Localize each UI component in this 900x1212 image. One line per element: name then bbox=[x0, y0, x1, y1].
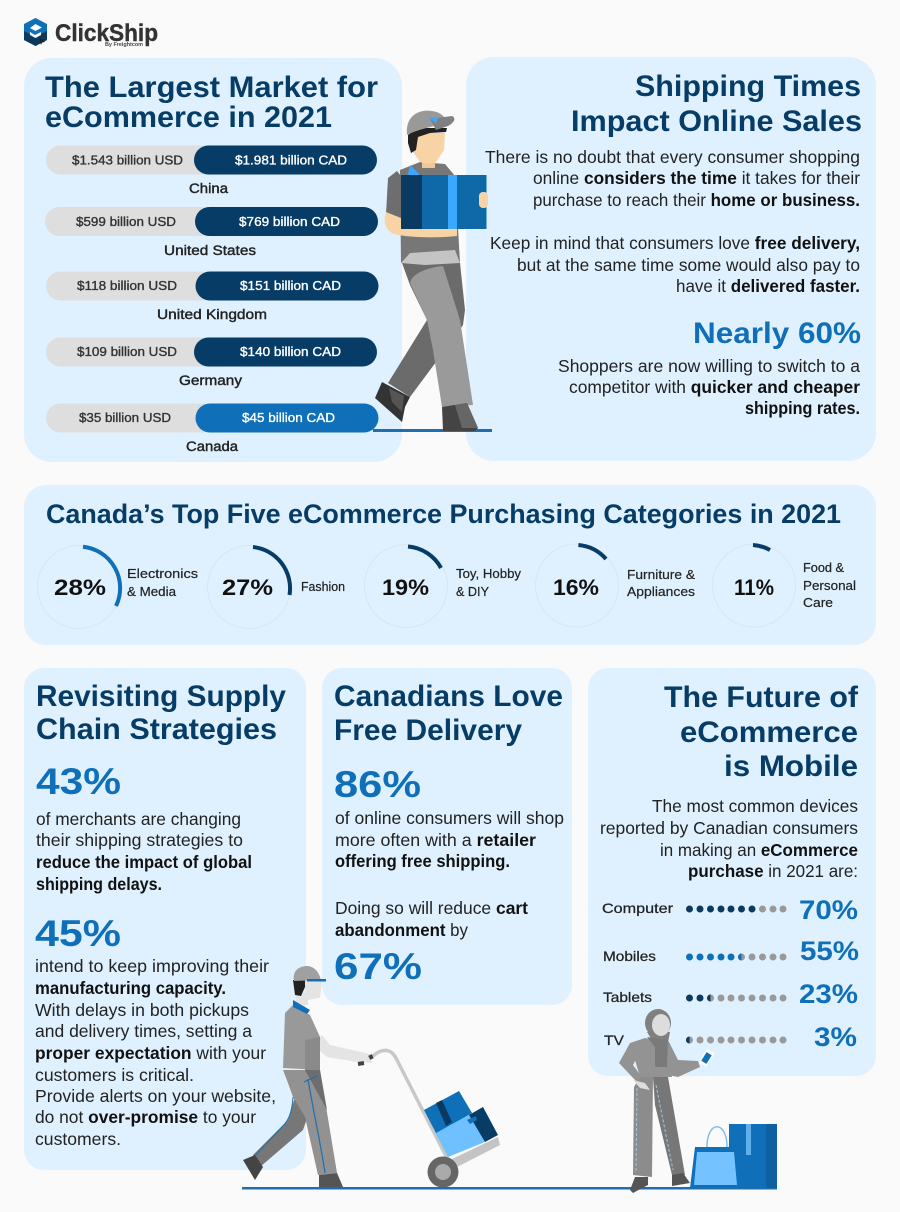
text block: merchants: of merchants are changing bbox=[36, 809, 241, 829]
text block: shop more often: of online consumers will shop bbox=[335, 808, 564, 828]
heading: mobile future: is Mobile bbox=[724, 750, 858, 783]
panel: top five categories bbox=[24, 485, 876, 645]
heading: mobile future: eCommerce bbox=[680, 716, 858, 749]
device row: mobiles: 55% bbox=[800, 936, 859, 966]
text block: manufacturing: intend to keep improving their bbox=[35, 956, 269, 976]
text block: shoppers switch bbox=[558, 356, 860, 418]
stat: 67%: 67% bbox=[334, 946, 422, 987]
ground line bbox=[373, 429, 492, 432]
donut: food 11%: Care bbox=[803, 596, 833, 610]
heading: mobile future bbox=[664, 681, 859, 783]
text block: shop more often: offering free shipping. bbox=[335, 851, 510, 871]
heading: categories: Canada’s Top Five eCommerce Purchasing Categories in 2021 bbox=[46, 499, 841, 529]
donut: toy hobby 19%: Toy, Hobby bbox=[456, 567, 522, 581]
heading: free delivery: Free Delivery bbox=[334, 714, 522, 747]
donut: food 11% bbox=[712, 544, 856, 627]
bar: Germany: Germany bbox=[179, 373, 242, 388]
donut: furniture 16%: 16% bbox=[553, 575, 599, 600]
stat: 43%: 43% bbox=[36, 761, 121, 802]
text block: devices bbox=[600, 796, 858, 881]
text block: shoppers switch: shipping rates. bbox=[745, 398, 860, 418]
donut: toy hobby 19%: 19% bbox=[382, 575, 429, 600]
donut: food 11%: Personal bbox=[803, 579, 856, 593]
device row: tv: 3% bbox=[814, 1022, 857, 1052]
text block: shoppers switch: Shoppers are now willing to switch to a bbox=[558, 356, 860, 376]
text block: cart abandonment: abandonment by bbox=[335, 920, 468, 940]
bar: China: $1.981 billion CAD bbox=[235, 152, 347, 168]
text block: merchants: their shipping strategies to bbox=[36, 830, 243, 850]
text block: manufacturing: proper expectation with your bbox=[35, 1043, 266, 1063]
donut: food 11%: 11% bbox=[734, 575, 774, 600]
stat: 45%: 45% bbox=[35, 913, 121, 954]
text block: consumer time bbox=[485, 147, 860, 210]
text block: merchants: reduce the impact of global bbox=[36, 852, 252, 872]
text block: manufacturing: customers is critical. bbox=[35, 1065, 194, 1085]
donut: furniture 16%: Furniture & bbox=[627, 568, 696, 582]
device row: computer: Computer bbox=[602, 900, 673, 916]
text block: merchants bbox=[36, 809, 252, 894]
text block: consumer time: purchase to reach their home or business. bbox=[533, 190, 860, 210]
heading: free delivery bbox=[334, 680, 563, 747]
donut: toy hobby 19% bbox=[364, 544, 522, 628]
stat: nearly 60%: Nearly 60% bbox=[693, 317, 861, 350]
device row: mobiles bbox=[603, 936, 859, 966]
panel: largest market bbox=[24, 58, 402, 462]
device row: tablets: Tablets bbox=[603, 989, 652, 1005]
bar: United States bbox=[45, 207, 378, 258]
illustration: woman with phone and bags bbox=[619, 1009, 777, 1193]
bar: United Kingdom: United Kingdom bbox=[157, 307, 267, 322]
text block: merchants: shipping delays. bbox=[36, 874, 162, 894]
wordmark: ClickShip bbox=[55, 20, 158, 47]
device row: tv bbox=[604, 1022, 857, 1052]
hand truck bbox=[373, 1050, 500, 1188]
text block: free delivery bbox=[490, 233, 860, 296]
heading: largest market: The Largest Market for bbox=[45, 71, 378, 104]
bar: United States: United States bbox=[164, 243, 256, 258]
heading: free delivery: Canadians Love bbox=[334, 680, 563, 713]
donut: food 11%: Food & bbox=[803, 561, 845, 575]
bar: Canada: $35 billion USD bbox=[79, 410, 171, 425]
device row: computer bbox=[602, 895, 858, 925]
box behind bag bbox=[729, 1124, 777, 1188]
text block: devices: purchase in 2021 are: bbox=[688, 861, 858, 881]
donut: fashion 27%: Fashion bbox=[301, 580, 345, 594]
text block: manufacturing: manufacturing capacity. bbox=[35, 978, 226, 998]
bar: Germany: $109 billion USD bbox=[77, 344, 177, 359]
donut: electronics 28%: & Media bbox=[127, 585, 176, 599]
tagline: By Freightcom bbox=[105, 42, 144, 48]
device row: mobiles: Mobiles bbox=[603, 948, 656, 964]
text block: free delivery: Keep in mind that consumers love free delivery, bbox=[490, 233, 860, 253]
text block: manufacturing: customers. bbox=[35, 1129, 121, 1149]
donut: fashion 27%: 27% bbox=[222, 575, 273, 600]
donut: electronics 28%: 28% bbox=[54, 575, 106, 600]
bar: China: China bbox=[189, 181, 229, 196]
text block: free delivery: have it delivered faster. bbox=[676, 276, 860, 296]
bar: United States: $599 billion USD bbox=[76, 214, 176, 229]
bar: Canada: $45 billion CAD bbox=[242, 410, 335, 425]
bar: United Kingdom: $118 billion USD bbox=[77, 278, 177, 293]
device row: tablets bbox=[603, 979, 858, 1009]
bar: Canada: Canada bbox=[186, 439, 239, 454]
text block: devices: The most common devices bbox=[652, 796, 858, 816]
ground line: bottom bbox=[242, 1187, 777, 1190]
panel: mobile future bbox=[588, 668, 876, 1076]
heading: largest market: eCommerce in 2021 bbox=[45, 101, 332, 134]
text block: free delivery: but at the same time some would also pay to bbox=[517, 255, 860, 275]
heading: mobile future: The Future of bbox=[664, 681, 859, 714]
bar: China bbox=[46, 146, 377, 196]
device row: tv: TV bbox=[604, 1032, 625, 1048]
bar: Germany: $140 billion CAD bbox=[240, 344, 341, 359]
text block: devices: in making an eCommerce bbox=[660, 840, 858, 860]
heading: shipping times: Shipping Times bbox=[635, 70, 861, 103]
bar: Germany bbox=[46, 338, 377, 388]
bar: United Kingdom bbox=[46, 272, 378, 322]
device row: computer: 70% bbox=[799, 895, 858, 925]
donut: furniture 16%: Appliances bbox=[627, 585, 695, 599]
donut: toy hobby 19%: & DIY bbox=[456, 585, 490, 599]
text block: devices: reported by Canadian consumers bbox=[600, 818, 858, 838]
cardboard box bbox=[401, 175, 486, 229]
donut: electronics 28% bbox=[38, 546, 198, 628]
text block: shop more often bbox=[335, 808, 564, 871]
panel: free delivery bbox=[322, 668, 572, 1005]
text block: cart abandonment bbox=[335, 898, 528, 940]
bar: Canada bbox=[46, 404, 378, 454]
text block: manufacturing: With delays in both pickups bbox=[35, 1000, 249, 1020]
text block: manufacturing: do not over-promise to your bbox=[35, 1107, 256, 1127]
illustration: delivery man with box bbox=[373, 111, 492, 432]
heading: shipping times bbox=[571, 70, 862, 138]
text block: consumer time: online considers the time it takes for their bbox=[533, 168, 860, 188]
donut: electronics 28%: Electronics bbox=[127, 567, 198, 581]
text block: manufacturing: and delivery times, setting a bbox=[35, 1021, 252, 1041]
heading: largest market bbox=[45, 71, 378, 134]
logo: ClickShip bbox=[24, 18, 158, 48]
bar: United States: $769 billion CAD bbox=[239, 214, 340, 229]
text block: cart abandonment: Doing so will reduce cart bbox=[335, 898, 528, 918]
icon: logo cube bbox=[24, 18, 47, 46]
heading: supply chain: Chain Strategies bbox=[36, 713, 277, 746]
panel: supply chain bbox=[24, 668, 306, 1170]
donut: furniture 16% bbox=[536, 544, 696, 627]
icon: phone bbox=[698, 1049, 715, 1067]
heading: supply chain: Revisiting Supply bbox=[36, 680, 286, 713]
text block: manufacturing: Provide alerts on your website, bbox=[35, 1086, 276, 1106]
text block: shoppers switch: competitor with quicker and cheaper bbox=[569, 377, 860, 397]
shopping bag bbox=[690, 1127, 743, 1188]
text block: consumer time: There is no doubt that every consumer shopping bbox=[485, 147, 860, 167]
bar: United Kingdom: $151 billion CAD bbox=[240, 278, 341, 293]
heading: supply chain bbox=[36, 680, 286, 746]
panel: shipping times bbox=[466, 57, 876, 461]
text block: shop more often: more often with a retailer bbox=[335, 830, 536, 850]
heading: shipping times: Impact Online Sales bbox=[571, 105, 862, 138]
text block: manufacturing bbox=[35, 956, 276, 1149]
stat: 86%: 86% bbox=[334, 764, 421, 805]
bar: China: $1.543 billion USD bbox=[72, 152, 183, 168]
device row: tablets: 23% bbox=[799, 979, 858, 1009]
illustration: man with hand truck bbox=[243, 966, 500, 1188]
donut: fashion 27% bbox=[208, 546, 345, 628]
